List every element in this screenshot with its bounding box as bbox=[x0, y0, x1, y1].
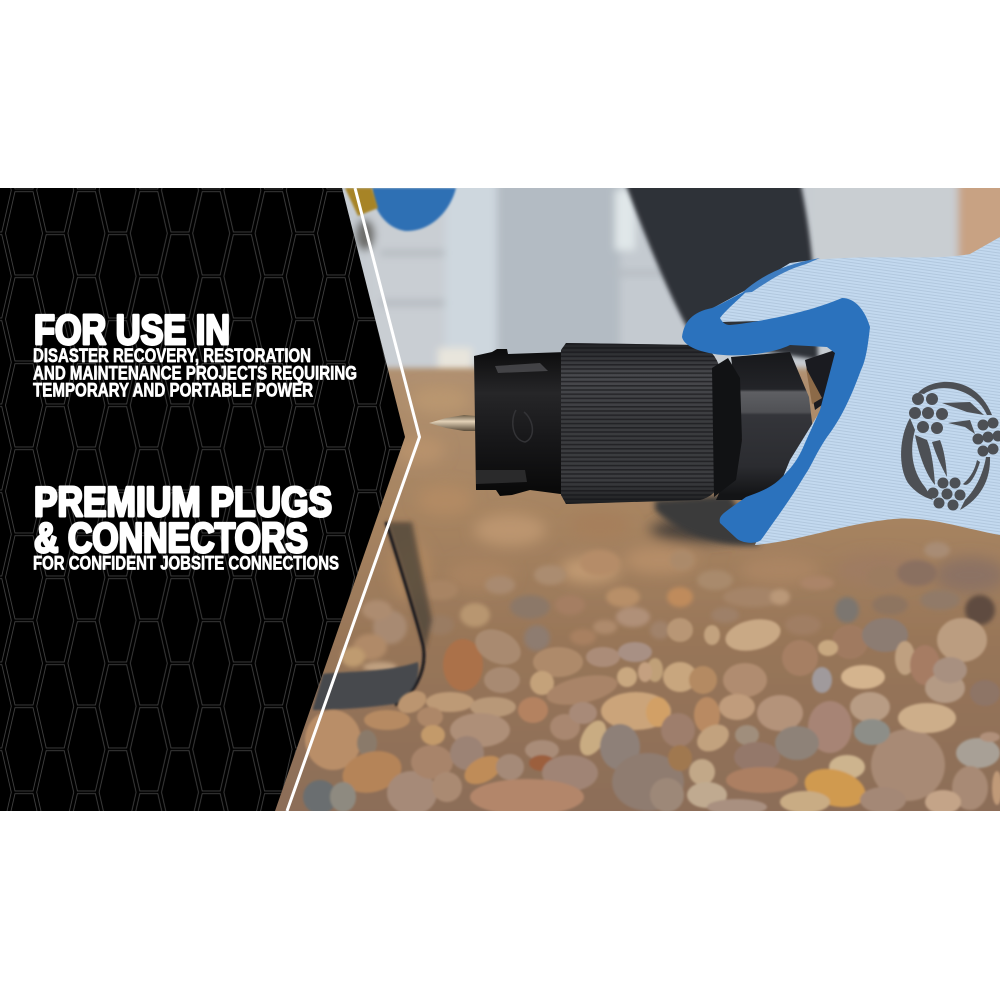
white chevron line bbox=[287, 188, 420, 811]
heading: premium plugs and connectors bbox=[34, 478, 332, 561]
description: use cases: DISASTER RECOVERY, RESTORATION bbox=[33, 346, 311, 367]
semi-blurred stones bbox=[341, 542, 995, 672]
glove logo bbox=[901, 382, 1000, 510]
gravel ground bbox=[260, 368, 1000, 838]
top sliver of blue on the glove bbox=[742, 258, 820, 293]
foreground stones bbox=[303, 615, 1000, 815]
blue rubber coating bbox=[682, 290, 870, 543]
panel: black hexagon-pattern chevron bbox=[0, 188, 405, 811]
text block: premium plugs and connectors bbox=[33, 478, 339, 574]
boot behind connector bbox=[655, 495, 760, 545]
description: jobsite connections: FOR CONFIDENT JOBSITE CONNECTIONS bbox=[33, 554, 339, 574]
heading: premium plugs and connectors: PREMIUM PLUGS bbox=[34, 478, 332, 525]
blurred mid-distance stones bbox=[390, 386, 1000, 600]
flower cluster right bbox=[972, 418, 1000, 456]
text block: for use in bbox=[33, 306, 357, 402]
description: use cases: AND MAINTENANCE PROJECTS REQUIRING bbox=[33, 364, 357, 384]
pin bbox=[429, 415, 476, 431]
gloved hand bbox=[682, 237, 1000, 545]
jeans leg bbox=[624, 180, 818, 360]
photo: gloved hand holding connector over gravel bbox=[260, 170, 1000, 838]
heading: premium plugs and connectors: & CONNECTORS bbox=[34, 514, 308, 561]
connector ribbed sleeve bbox=[561, 343, 722, 504]
blue glove at top left bbox=[372, 188, 456, 231]
flower cluster bottom bbox=[928, 478, 966, 510]
glove knit body bbox=[700, 237, 1000, 545]
yellow tool edge bbox=[345, 188, 378, 216]
connector black base bbox=[474, 349, 568, 496]
connector collar and hex nut bbox=[712, 350, 840, 500]
flower cluster top left bbox=[909, 393, 948, 434]
heading: for use in: FOR USE IN bbox=[34, 306, 230, 353]
description: use cases: TEMPORARY AND PORTABLE POWER bbox=[33, 380, 313, 402]
blurred building backdrop bbox=[342, 188, 1000, 371]
metal frame strap bbox=[313, 522, 432, 710]
description: use cases bbox=[33, 346, 357, 402]
